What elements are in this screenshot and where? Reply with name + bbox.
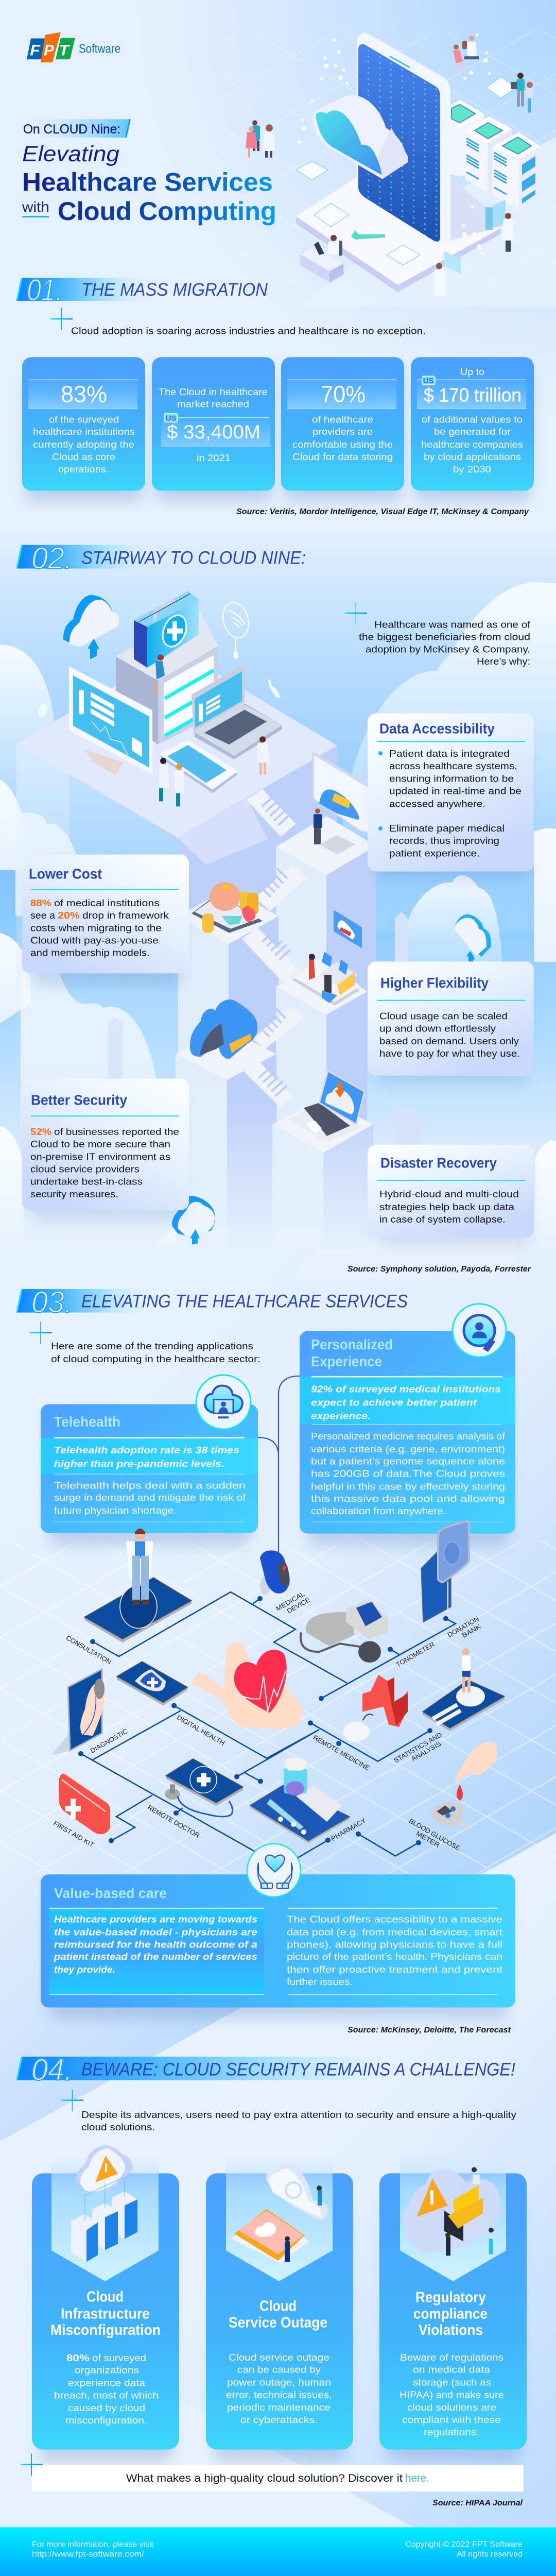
tablet with cloud	[312, 751, 371, 834]
icon: glucose meter	[431, 1802, 468, 1829]
card title: Telehealth	[54, 1414, 120, 1430]
stat card 70%	[281, 357, 404, 491]
body text	[54, 1480, 246, 1516]
card text: cloud service providers	[30, 1164, 140, 1175]
panel: value-based care	[41, 1844, 515, 2019]
circuit nodes	[78, 1596, 448, 1845]
body text: further issues.	[287, 1977, 353, 1988]
card title: Experience	[311, 1353, 382, 1369]
stat card 170 trillion: by cloud applications	[424, 452, 521, 463]
labels: CONSULTATION	[65, 1634, 113, 1666]
card title: Violations	[419, 2322, 483, 2338]
card text	[399, 2352, 504, 2438]
card text	[30, 898, 169, 958]
card text: error, technical issues,	[226, 2389, 332, 2400]
intro text 2: Healthcare was named as one of	[374, 620, 531, 631]
panel: compliance violations	[379, 2158, 527, 2462]
card text: compliant with these	[402, 2415, 501, 2426]
card title: Regulatory	[415, 2290, 486, 2306]
stat card 33,400M: in 2021	[197, 453, 231, 464]
body text: collaboration from anywhere.	[311, 1506, 446, 1517]
bullet list: across healthcare systems,	[389, 761, 517, 772]
callout: discover	[32, 2465, 524, 2492]
person: researcher	[485, 199, 514, 252]
card title: Cloud	[86, 2289, 124, 2306]
card text: storage (such as	[413, 2378, 491, 2388]
logo: P	[44, 42, 54, 59]
card title: Data Accessibility	[379, 720, 495, 736]
icon: heart in hands	[192, 1642, 304, 1730]
footer: http://www.fpt-software.com/	[32, 2550, 145, 2558]
bullet list: accessed anywhere.	[389, 799, 485, 809]
pillars and platforms	[16, 650, 422, 1249]
body text: has 200GB of data.The Cloud proves	[311, 1469, 505, 1479]
highlight text: 92% of surveyed medical institutions	[311, 1384, 501, 1395]
card text: have to pay for what they use.	[379, 1048, 520, 1059]
stat card 33,400M: The Cloud in healthcare	[159, 387, 268, 398]
card text	[379, 1189, 519, 1225]
stat card 83%: Cloud as core	[52, 452, 115, 463]
panel: higher flexibility	[368, 961, 534, 1085]
check mark	[351, 230, 385, 240]
card text: misconfiguration.	[65, 2415, 147, 2426]
body text: then offer proactive treatment and prevent	[287, 1964, 503, 1975]
cloud	[312, 95, 408, 179]
plus mark	[61, 2089, 83, 2111]
card title: Better Security	[31, 1092, 127, 1108]
panel: data accessibility	[368, 714, 534, 880]
logo: F	[30, 42, 41, 59]
labels: STATISTICS AND	[393, 1731, 443, 1765]
highlight text	[54, 1445, 239, 1470]
card text: organizations	[75, 2365, 139, 2376]
tiles	[296, 77, 516, 265]
highlight text: patient instead of the number of services	[54, 1952, 257, 1962]
panel: misconfiguration	[32, 2145, 179, 2462]
icon: first aid kit	[59, 1773, 110, 1834]
card text: of surveyed	[92, 2353, 146, 2364]
card title: Service Outage	[229, 2314, 327, 2331]
card text: Cloud to be more secure than	[30, 1139, 170, 1150]
stairs	[242, 789, 306, 1108]
icon: tonometer	[301, 1601, 388, 1663]
highlight text	[311, 1384, 501, 1421]
people in stairway top	[153, 654, 270, 806]
illustration: filing cabinet and warning	[403, 2167, 501, 2256]
card text: power outage, human	[227, 2378, 331, 2388]
person: man with tablet	[314, 808, 322, 844]
stat card 170 trillion: $ 170 trillion	[424, 385, 522, 406]
card text: 88%	[30, 898, 51, 909]
laptop	[192, 664, 282, 759]
stat card 83%: of the surveyed	[49, 414, 119, 425]
stat card 83%	[22, 357, 145, 491]
footer: For more information, please visit	[32, 2540, 154, 2549]
logo: Software	[79, 42, 120, 56]
card text: drop in framework	[82, 910, 169, 921]
section 4 heading: 04.	[31, 2053, 73, 2087]
footer: All rights reserved	[457, 2550, 523, 2558]
connector arrows	[258, 1376, 300, 1555]
card text: of businesses reported the	[54, 1127, 179, 1138]
labels: MEDICAL	[274, 1590, 306, 1613]
logo: T	[59, 42, 71, 59]
highlight text	[54, 1914, 257, 1975]
labels	[52, 1590, 482, 1852]
chart: healthcare isometric circuit diagram	[51, 1521, 505, 1857]
bullet list: records, thus improving	[389, 836, 499, 846]
card text	[379, 1011, 520, 1059]
panel: disaster recovery	[368, 1145, 534, 1246]
bullet list: updated in real-time and be	[389, 786, 522, 797]
bullet list: Eliminate paper medical	[389, 823, 505, 834]
labels: REMOTE MEDICINE	[312, 1734, 371, 1772]
icon: first aid case	[134, 591, 199, 668]
person: couple	[246, 120, 275, 158]
section 2 heading	[16, 541, 306, 575]
servers	[450, 100, 540, 209]
body text: Telehealth helps deal with a sudden	[54, 1480, 246, 1491]
body text: various criteria (e.g. gene, environment)	[311, 1444, 505, 1455]
highlight text: Telehealth adoption rate is 38 times	[54, 1445, 239, 1456]
platform object	[319, 835, 355, 855]
body text: Personalized medicine requires analysis of	[311, 1431, 506, 1442]
panel: lower cost	[22, 855, 189, 985]
title block	[22, 119, 276, 226]
card text: Beware of regulations	[400, 2352, 503, 2363]
labels: BANK	[461, 1622, 482, 1639]
person: doctor with tablet	[434, 251, 461, 296]
card text	[54, 2353, 159, 2426]
intro text 3: of cloud computing in the healthcare sector:	[51, 1354, 260, 1365]
plus mark	[345, 602, 367, 624]
intro text 4: cloud solutions.	[81, 2122, 155, 2133]
intro text 3: Here are some of the trending applications	[51, 1341, 253, 1352]
callout: discover: here.	[405, 2472, 429, 2484]
card title: Lower Cost	[29, 866, 102, 882]
bullet list	[378, 749, 522, 859]
section 4 heading	[16, 2053, 515, 2087]
body text: future physician shortage.	[54, 1505, 177, 1516]
icon: cloud upload	[63, 595, 119, 659]
highlight text: expect to achieve better patient	[311, 1398, 477, 1408]
illustration: servers with warning cloud	[71, 2145, 137, 2262]
card text: caused by cloud	[68, 2403, 145, 2414]
footer: Copyright © 2022 FPT Software	[405, 2540, 523, 2549]
section 2 heading: STAIRWAY TO CLOUD NINE:	[81, 548, 306, 568]
card text: undertake best-in-class	[30, 1176, 143, 1187]
icon: pharmacy tray	[250, 1758, 350, 1843]
stat card 170 trillion: be generated for	[434, 427, 511, 437]
icon: chip cloud	[190, 999, 257, 1059]
illustration: stairway	[16, 591, 491, 1249]
labels: ANALYSIS	[410, 1739, 443, 1762]
intro text 2: adoption by McKinsey & Company.	[366, 644, 530, 655]
illustration: hero cloud phone and servers	[246, 33, 540, 296]
stat card 83%: 83%	[61, 381, 107, 408]
stat card 170 trillion: US	[423, 377, 433, 385]
card text: breach, most of which	[54, 2390, 159, 2401]
icon: donation bank	[421, 1521, 469, 1622]
section 3 heading: ELEVATING THE HEALTHCARE SERVICES	[81, 1292, 408, 1312]
card title: Higher Flexibility	[380, 975, 489, 991]
stat card 33,400M: $ 33,400M	[167, 421, 260, 443]
labels: DIGITAL HEALTH	[176, 1714, 226, 1747]
panel: better security	[22, 1079, 189, 1221]
icon: telehealth	[196, 1375, 251, 1429]
stat card 33,400M: market reached	[177, 399, 249, 410]
card text: can be caused by	[237, 2365, 321, 2376]
intro text 4: Despite its advances, users need to pay extra attention to security and ensure a high-quality	[81, 2110, 517, 2121]
stat card 83%: healthcare institutions	[33, 427, 135, 437]
icon: wifi	[219, 600, 252, 658]
card text: experience data	[68, 2378, 146, 2388]
card title: Misconfiguration	[50, 2322, 161, 2338]
icon: shield tablet	[117, 1662, 187, 1705]
icon: remote doctor tablet	[165, 1759, 243, 1817]
person: doctor at desk	[300, 235, 344, 282]
cloud upload bottom	[172, 1196, 215, 1245]
small cloud tile	[334, 910, 362, 948]
source 4: Source: HIPAA Journal	[432, 2499, 523, 2507]
labels: DONATION	[446, 1615, 480, 1639]
body text: data pool (e.g. from medical devices, smart	[287, 1927, 503, 1938]
icon: office desks	[292, 952, 360, 1006]
panel: personalized experience	[300, 1304, 515, 1546]
server tower	[116, 609, 218, 744]
stat card 70%: comfortable using the	[292, 439, 393, 450]
footer	[0, 2527, 556, 2576]
floating dots	[298, 33, 491, 255]
section 2 heading: 02.	[31, 541, 73, 575]
card text: security measures.	[30, 1189, 118, 1200]
labels: PHARMACY	[329, 1816, 368, 1842]
illustration panel	[400, 2158, 506, 2281]
stat card 170 trillion	[411, 357, 534, 491]
phone	[160, 740, 238, 793]
card text: or cyberattacks.	[240, 2415, 318, 2426]
card title	[413, 2290, 488, 2338]
title block: Cloud Computing	[58, 197, 276, 226]
icon: finger and blood drop	[454, 1741, 497, 1801]
panel: stat cards	[22, 357, 534, 501]
labels: DIAGNOSTIC	[89, 1727, 129, 1755]
icon: wristband	[260, 1550, 290, 1595]
body text: helpful in this case by effectively storing	[311, 1481, 505, 1492]
section 1 heading: THE MASS MIGRATION	[81, 280, 268, 300]
card title: Infrastructure	[61, 2306, 150, 2322]
card text: up and down effortlessly	[379, 1023, 496, 1034]
section 1 heading	[16, 273, 268, 307]
highlight text: reimbursed for the health outcome of a	[54, 1939, 257, 1950]
card text: cloud solutions are	[407, 2402, 496, 2413]
card text: regulations.	[424, 2427, 479, 2438]
body text: this massive data pool and allowing	[311, 1494, 505, 1504]
labels: METER	[415, 1829, 441, 1849]
body text: surge in demand and mitigate the risk of	[54, 1493, 246, 1503]
section 3 heading: 03.	[31, 1285, 73, 1319]
card title	[50, 2289, 161, 2338]
bullet list: ensuring information to be	[389, 774, 514, 785]
card text: and membership models.	[30, 947, 150, 958]
plus mark	[30, 1322, 52, 1344]
section 1 heading: 01.	[27, 273, 63, 307]
stat card 170 trillion: by 2030	[453, 464, 491, 475]
background clouds: section 2	[0, 582, 556, 1279]
card text: 20%	[58, 910, 80, 921]
card text: on-premise IT environment as	[30, 1152, 170, 1163]
card title	[229, 2298, 327, 2331]
intro text 2: Here’s why:	[477, 656, 530, 667]
icon: piggy bank on clipboard	[192, 882, 263, 933]
card text: 52%	[30, 1127, 51, 1138]
stat card 70%: Cloud for data storing	[292, 452, 393, 463]
body text: picture of the patient’s health. Physicians can	[287, 1952, 502, 1962]
stat card 70%: 70%	[321, 381, 366, 408]
intro text 2	[359, 620, 531, 667]
card text: HIPAA) and make sure	[399, 2389, 504, 2400]
card text: periodic maintenance	[227, 2402, 331, 2413]
card text: strategies help back up data	[379, 1202, 515, 1213]
circuit lines	[81, 1592, 456, 1857]
card title: Personalized	[311, 1336, 393, 1352]
card text: 80%	[66, 2353, 90, 2364]
highlight text: experience.	[311, 1411, 371, 1421]
monitor	[69, 666, 152, 775]
title block: with	[22, 199, 49, 215]
logo	[27, 32, 120, 62]
icon: runner on tablet	[423, 1648, 505, 1731]
stat card 70%: providers are	[312, 427, 373, 437]
body text: The Cloud offers accessibility to a massive	[287, 1914, 502, 1925]
hearts	[37, 680, 280, 718]
highlight text: Healthcare providers are moving towards	[54, 1914, 257, 1925]
body text	[287, 1914, 503, 1988]
icon: diagnostic tablet	[51, 1669, 106, 1755]
intro text 3	[51, 1341, 260, 1365]
intro text 2: the biggest beneficiaries from cloud	[359, 632, 530, 643]
highlight text: they provide.	[54, 1964, 115, 1975]
stat card 83%: currently adopting the	[33, 439, 134, 450]
callout: discover: What makes a high-quality cloud solution? Discover it	[126, 2472, 403, 2484]
stat card 33,400M	[152, 357, 275, 491]
illustration: outage cloud and tablet	[231, 2163, 328, 2263]
card text: Cloud with pay-as-you-use	[30, 936, 159, 946]
card text: based on demand. Users only	[379, 1036, 519, 1047]
labels: REMOTE DOCTOR	[146, 1803, 201, 1839]
card title: Disaster Recovery	[380, 1155, 497, 1171]
card title: compliance	[413, 2306, 488, 2322]
panel: service outage	[206, 2158, 353, 2462]
labels: FIRST AID KIT	[52, 1819, 96, 1849]
labels: DEVICE	[286, 1596, 311, 1615]
bullet list: Patient data is integrated	[389, 749, 510, 759]
intro text 1: Cloud adoption is soaring across industries and healthcare is no exception.	[71, 326, 426, 337]
icon: consultation tablet with doctor	[84, 1529, 192, 1642]
card text	[30, 1127, 179, 1200]
icon: caring hands	[247, 1844, 301, 1897]
stat card 170 trillion: healthcare companies	[421, 439, 523, 450]
stat card 83%: operations.	[58, 464, 109, 475]
card text: Hybrid-cloud and multi-cloud	[379, 1189, 519, 1200]
highlight text: the value-based model - physicians are	[54, 1927, 257, 1938]
section 4 heading: BEWARE: CLOUD SECURITY REMAINS A CHALLENGE!	[81, 2060, 515, 2080]
icon: laptop with cloud	[289, 1071, 364, 1142]
stat card 170 trillion: of additional values to	[422, 414, 523, 425]
section 3 heading	[16, 1285, 408, 1319]
icon: red cross and mouse	[343, 1675, 408, 1742]
intro text 4	[81, 2110, 517, 2133]
illustration panel	[226, 2158, 333, 2281]
card text: of medical institutions	[54, 898, 160, 909]
phone	[357, 33, 450, 245]
source 3: Source: McKinsey, Deloitte, The Forecast	[348, 2026, 511, 2035]
person: child and doctor	[453, 36, 479, 71]
card text: on medical data	[413, 2365, 491, 2376]
body text: but a patient’s genome sequence alone	[311, 1456, 505, 1467]
card text: see a	[30, 910, 55, 921]
labels: TONOMETER	[395, 1640, 436, 1669]
person: nurse and visitor	[511, 73, 533, 113]
card text: Cloud service outage	[229, 2352, 329, 2363]
title block: On CLOUD Nine:	[23, 122, 120, 137]
card text: costs when migrating to the	[30, 923, 162, 934]
cloud upload right	[454, 914, 491, 963]
panel: telehealth	[41, 1375, 258, 1546]
title block: Healthcare Services	[22, 168, 273, 196]
card text	[226, 2352, 332, 2426]
title block: Elevating	[22, 142, 119, 166]
illustration panel	[51, 2158, 159, 2281]
stat card 70%: of healthcare	[312, 414, 373, 425]
bullet list: patient experience.	[389, 849, 480, 859]
card title: Value-based care	[54, 1885, 167, 1901]
source 1: Source: Veritis, Mordor Intelligence, Visual Edge IT, McKinsey & Company	[236, 507, 529, 516]
stat card 170 trillion: Up to	[460, 367, 484, 378]
card title: Cloud	[259, 2298, 297, 2314]
card text: in case of system collapse.	[379, 1214, 506, 1225]
labels: BLOOD GLUCOSE	[408, 1817, 462, 1852]
card text: Cloud usage can be scaled	[379, 1011, 508, 1022]
platform	[296, 178, 507, 292]
source 2: Source: Symphony solution, Payoda, Forrester	[348, 1265, 531, 1274]
body text	[311, 1431, 506, 1517]
card title	[311, 1336, 393, 1369]
stat card 33,400M: US	[166, 414, 176, 422]
plus mark	[50, 308, 73, 330]
plus mark	[21, 2454, 43, 2476]
icon: personalized	[453, 1304, 506, 1357]
highlight text: higher than pre-pandemic levels.	[54, 1459, 224, 1470]
body text: phones), allowing physicians to have a full	[287, 1939, 502, 1950]
